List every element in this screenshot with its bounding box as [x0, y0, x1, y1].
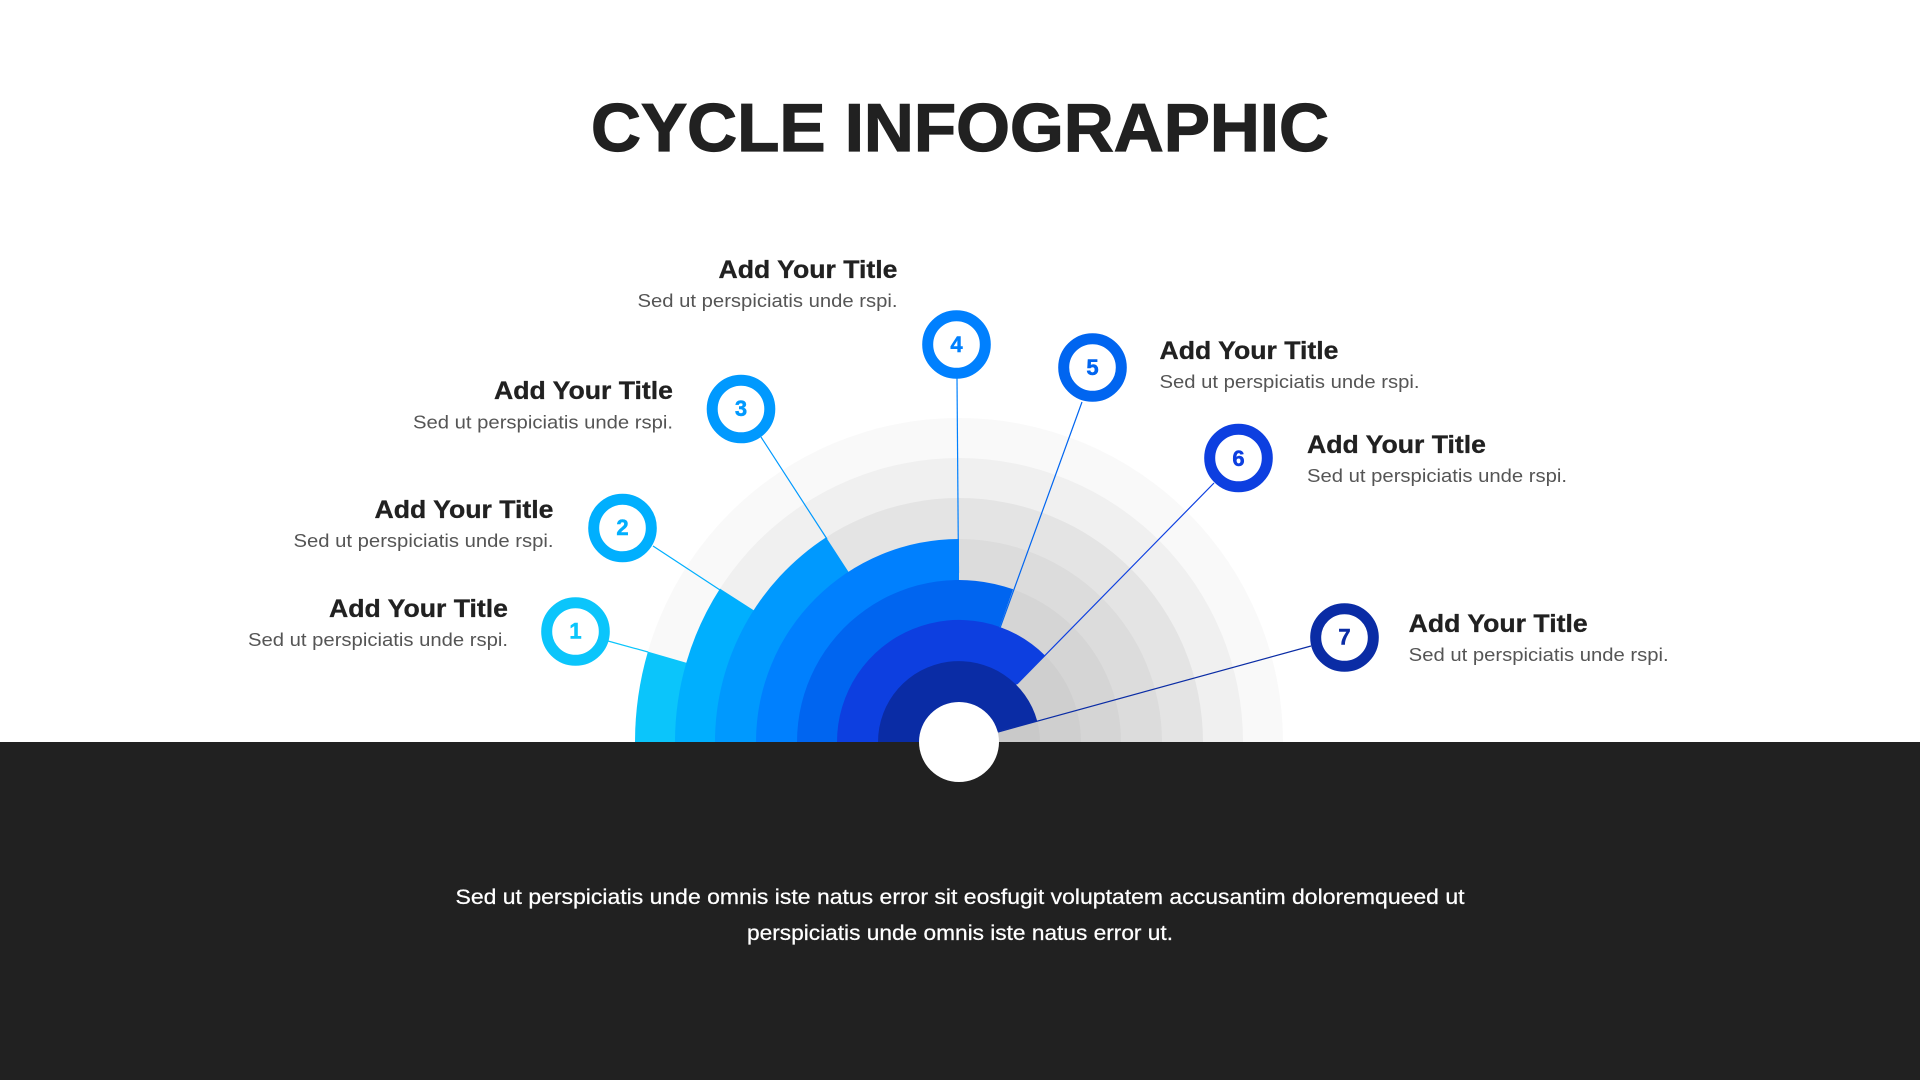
chart: grey concentric background rings [635, 418, 1283, 1066]
item 5 text [1160, 337, 1420, 392]
item 7 text: Add Your Title [1409, 610, 1588, 638]
item 1 text: Add Your Title [329, 595, 508, 623]
node 4 [928, 316, 985, 373]
node 3: 3 [735, 396, 747, 421]
node 6 [1210, 429, 1267, 487]
node 5: 5 [1086, 355, 1099, 380]
item 3 text: Sed ut perspiciatis unde rspi. [413, 412, 673, 432]
node 6: 6 [1232, 446, 1245, 471]
node 4: 4 [950, 332, 963, 357]
item 5 text: Add Your Title [1160, 337, 1339, 365]
footer text block: Sed ut perspiciatis unde omnis iste natus error sit eosfugit voluptatem accusantim doloremqueed ut [456, 885, 1465, 909]
title: CYCLE INFOGRAPHIC [591, 90, 1329, 166]
item 7 text: Sed ut perspiciatis unde rspi. [1409, 644, 1669, 665]
node 1: 1 [569, 618, 582, 644]
item 1 text: Sed ut perspiciatis unde rspi. [248, 629, 508, 650]
node 7: 7 [1338, 624, 1351, 650]
node 2: 2 [616, 515, 629, 540]
item 6 text: Sed ut perspiciatis unde rspi. [1307, 465, 1567, 486]
footer text block: perspiciatis unde omnis iste natus error ut. [747, 921, 1173, 945]
node 3 [712, 380, 770, 438]
footer text block [456, 885, 1465, 945]
item 2 text [294, 496, 554, 551]
item 4 text: Add Your Title [718, 256, 898, 284]
item 6 text: Add Your Title [1307, 431, 1486, 459]
item 3 text: Add Your Title [494, 377, 673, 405]
item 7 text [1409, 610, 1669, 665]
chart: coloured cycle sectors [635, 537, 1045, 742]
item 5 text: Sed ut perspiciatis unde rspi. [1160, 371, 1420, 392]
item 2 text: Add Your Title [374, 496, 554, 524]
dark footer band [0, 742, 1920, 1080]
node 7 [1316, 609, 1373, 666]
node 1 [547, 603, 604, 660]
node 5 [1064, 339, 1121, 396]
item 4 text: Sed ut perspiciatis unde rspi. [638, 290, 898, 311]
item 4 text [638, 256, 898, 311]
item 6 text [1307, 431, 1567, 486]
item 1 text [248, 595, 508, 650]
centre white circle [919, 702, 999, 782]
connector lines [608, 378, 1311, 732]
node 2 [594, 499, 651, 557]
item 3 text [413, 377, 673, 432]
item 2 text: Sed ut perspiciatis unde rspi. [294, 530, 554, 551]
